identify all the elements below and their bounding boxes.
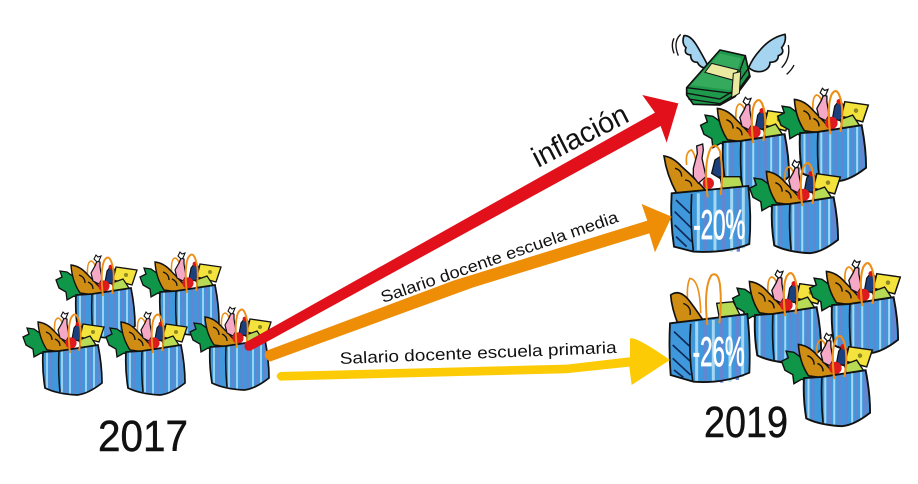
panel: 2017 shopping bags [23, 252, 275, 400]
bag 2017 upper right [140, 252, 225, 340]
arrow: salario escuela primaria (yellow) [277, 338, 670, 385]
arrow: salario escuela media (orange) [265, 204, 672, 362]
bag 2017 lower middle [106, 312, 191, 400]
icon: flying money [672, 34, 794, 105]
icon: right wing [749, 34, 785, 72]
label: Salario docente escuela primaria: Salario docente escuela primaria [339, 339, 618, 368]
label: -20%: -20% [693, 201, 745, 248]
label: Salario docente escuela media: Salario docente escuela media [378, 208, 622, 307]
arrow: inflación (red) [244, 95, 678, 351]
panel: 2019 bottom shopping bags [669, 260, 905, 432]
bag 2017 lower right [190, 307, 275, 395]
bag 2017 lower left [23, 312, 108, 400]
bag 2019 top back left [701, 97, 796, 196]
icon: left wing [683, 36, 709, 68]
panel: 2019 top shopping bags [664, 88, 873, 259]
bag 2019 bottom left [733, 270, 828, 369]
bag 2019 top back right [778, 88, 873, 187]
heading: 2019: 2019 [704, 398, 788, 447]
icon: banknote stack [687, 50, 750, 105]
label: inflación: inflación [527, 99, 634, 174]
large bag with -20% [664, 144, 750, 252]
large bag with -26% [669, 274, 750, 383]
bag 2019 bottom front [782, 333, 877, 432]
heading: 2017: 2017 [98, 412, 188, 461]
bag 2019 bottom right [810, 260, 905, 359]
bag 2017 upper left [56, 255, 141, 343]
label: -26%: -26% [693, 328, 745, 375]
bag 2019 top front right [750, 160, 845, 259]
